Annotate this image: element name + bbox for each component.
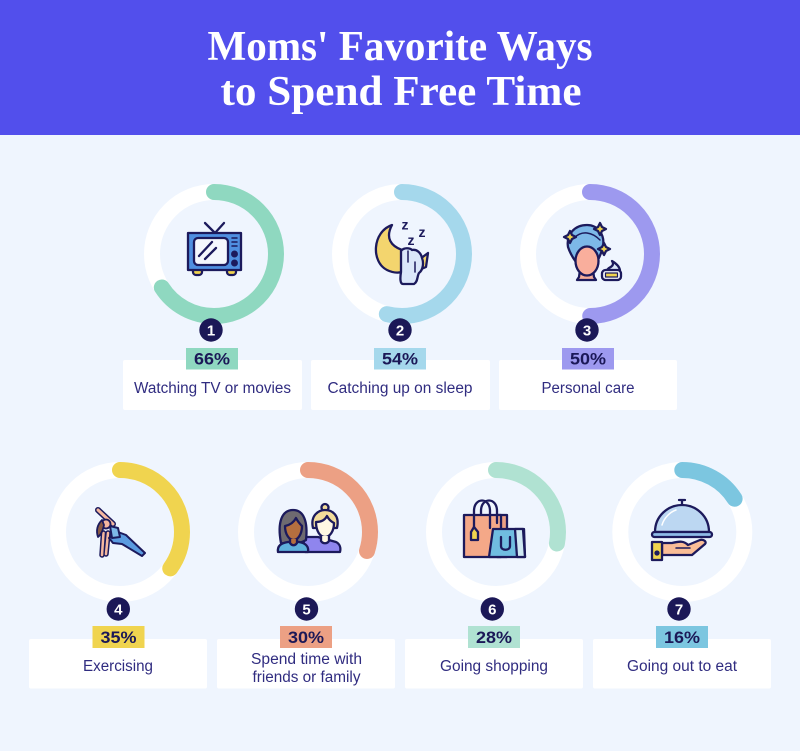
donut chart: 28% [434, 470, 558, 594]
rank badge 7: 7 [675, 602, 683, 618]
panel: exercising [29, 470, 207, 688]
percent tag [92, 626, 144, 648]
label: Going out to eat [627, 658, 738, 675]
info card [499, 348, 677, 410]
rank badge 3: 3 [583, 322, 591, 340]
icon: television [188, 223, 241, 275]
icon: towel wrapped head with cream [564, 223, 621, 280]
icon: shopping bags [464, 500, 525, 557]
percent tag: 30% [288, 628, 324, 647]
percent tag [656, 626, 708, 648]
icon: two friends [278, 504, 340, 552]
rank badge 4: 4 [114, 602, 123, 618]
percent tag: 66% [194, 350, 230, 368]
info card [217, 626, 395, 688]
panel: watching TV or movies [123, 192, 302, 410]
percent tag: 50% [570, 350, 606, 368]
donut chart: 54% [340, 192, 464, 316]
rank badge 6 [481, 597, 504, 621]
label: Catching up on sleep [328, 380, 472, 397]
percent tag: 54% [382, 350, 418, 368]
info card [593, 626, 771, 688]
panel: catching up on sleep [311, 192, 490, 410]
rank badge 3 [575, 318, 599, 342]
label: friends or family [252, 669, 361, 686]
rank badge 4 [107, 597, 130, 621]
percent tag [468, 626, 520, 648]
info card [29, 626, 207, 688]
icon: serving cloche on hand [652, 500, 712, 560]
label: Spend time with [251, 651, 362, 668]
label: Going shopping [440, 658, 548, 675]
percent tag: 16% [664, 628, 700, 647]
icon: moon and cloud: z [402, 216, 408, 232]
rank badge 1 [199, 318, 223, 342]
rank badge 7 [667, 597, 691, 621]
percent tag [374, 348, 426, 370]
percent tag: 28% [476, 628, 512, 647]
header banner [0, 0, 800, 135]
panel: personal care [499, 192, 677, 410]
percent tag [562, 348, 614, 370]
rank badge 6: 6 [488, 602, 496, 618]
icon: moon and cloud: z [408, 232, 414, 248]
percent tag: 35% [100, 628, 136, 647]
title [208, 24, 592, 115]
rank badge 2 [388, 318, 412, 342]
panel: spend time with friends or family [217, 470, 395, 688]
donut chart: 50% [528, 192, 652, 316]
percent tag [186, 348, 238, 370]
icon: moon and cloud: z [418, 224, 426, 240]
info card [311, 348, 490, 410]
rank badge 5 [295, 597, 318, 621]
info card [405, 626, 583, 688]
donut chart: 16% [620, 470, 744, 594]
percent tag [280, 626, 332, 648]
panel: going shopping [405, 470, 583, 688]
icon: moon and cloud [376, 216, 428, 284]
title: Moms' Favorite Ways [208, 24, 592, 70]
title: to Spend Free Time [220, 69, 582, 115]
panel: going out to eat [593, 470, 771, 688]
label: Watching TV or movies [134, 380, 291, 397]
label: Personal care [542, 380, 634, 397]
donut chart: 66% [152, 192, 276, 316]
rank badge 5: 5 [302, 602, 311, 618]
label [251, 651, 362, 686]
rank badge 1: 1 [207, 322, 215, 340]
donut chart: 35% [58, 470, 182, 594]
label: Exercising [83, 658, 153, 675]
info card [123, 348, 302, 410]
donut chart: 30% [246, 470, 370, 594]
icon: yoga pose [97, 510, 145, 556]
rank badge 2: 2 [396, 322, 404, 340]
